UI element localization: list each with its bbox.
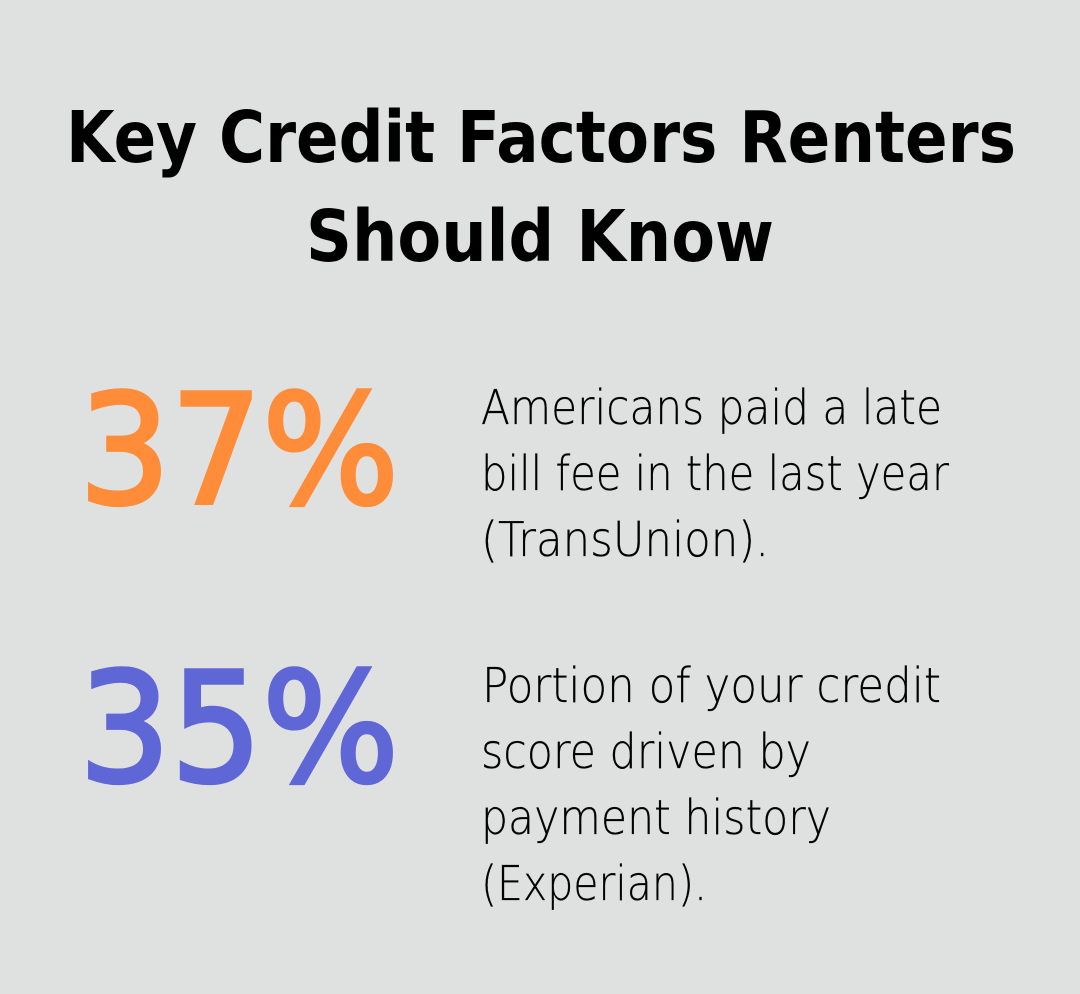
stat: 35%: 35%	[79, 640, 399, 817]
text block: late bill fee description: Americans paid a late	[481, 380, 942, 436]
stat: 37%: 37%	[79, 362, 399, 539]
text block: payment history description: payment history	[481, 790, 831, 846]
text block: late bill fee description: bill fee in the last year	[481, 446, 949, 502]
text block: payment history description: Portion of your credit	[482, 658, 941, 714]
title	[66, 96, 1016, 278]
text block: late bill fee description	[481, 380, 949, 568]
text block: payment history description: score driven by	[481, 724, 811, 780]
text block: late bill fee description: (TransUnion).	[481, 512, 769, 568]
panel: late bill fee statistic	[79, 362, 949, 568]
text block: payment history description	[481, 658, 941, 912]
panel: payment history statistic	[79, 640, 941, 912]
title: Should Know	[306, 195, 774, 278]
text block: payment history description: (Experian).	[481, 856, 707, 912]
